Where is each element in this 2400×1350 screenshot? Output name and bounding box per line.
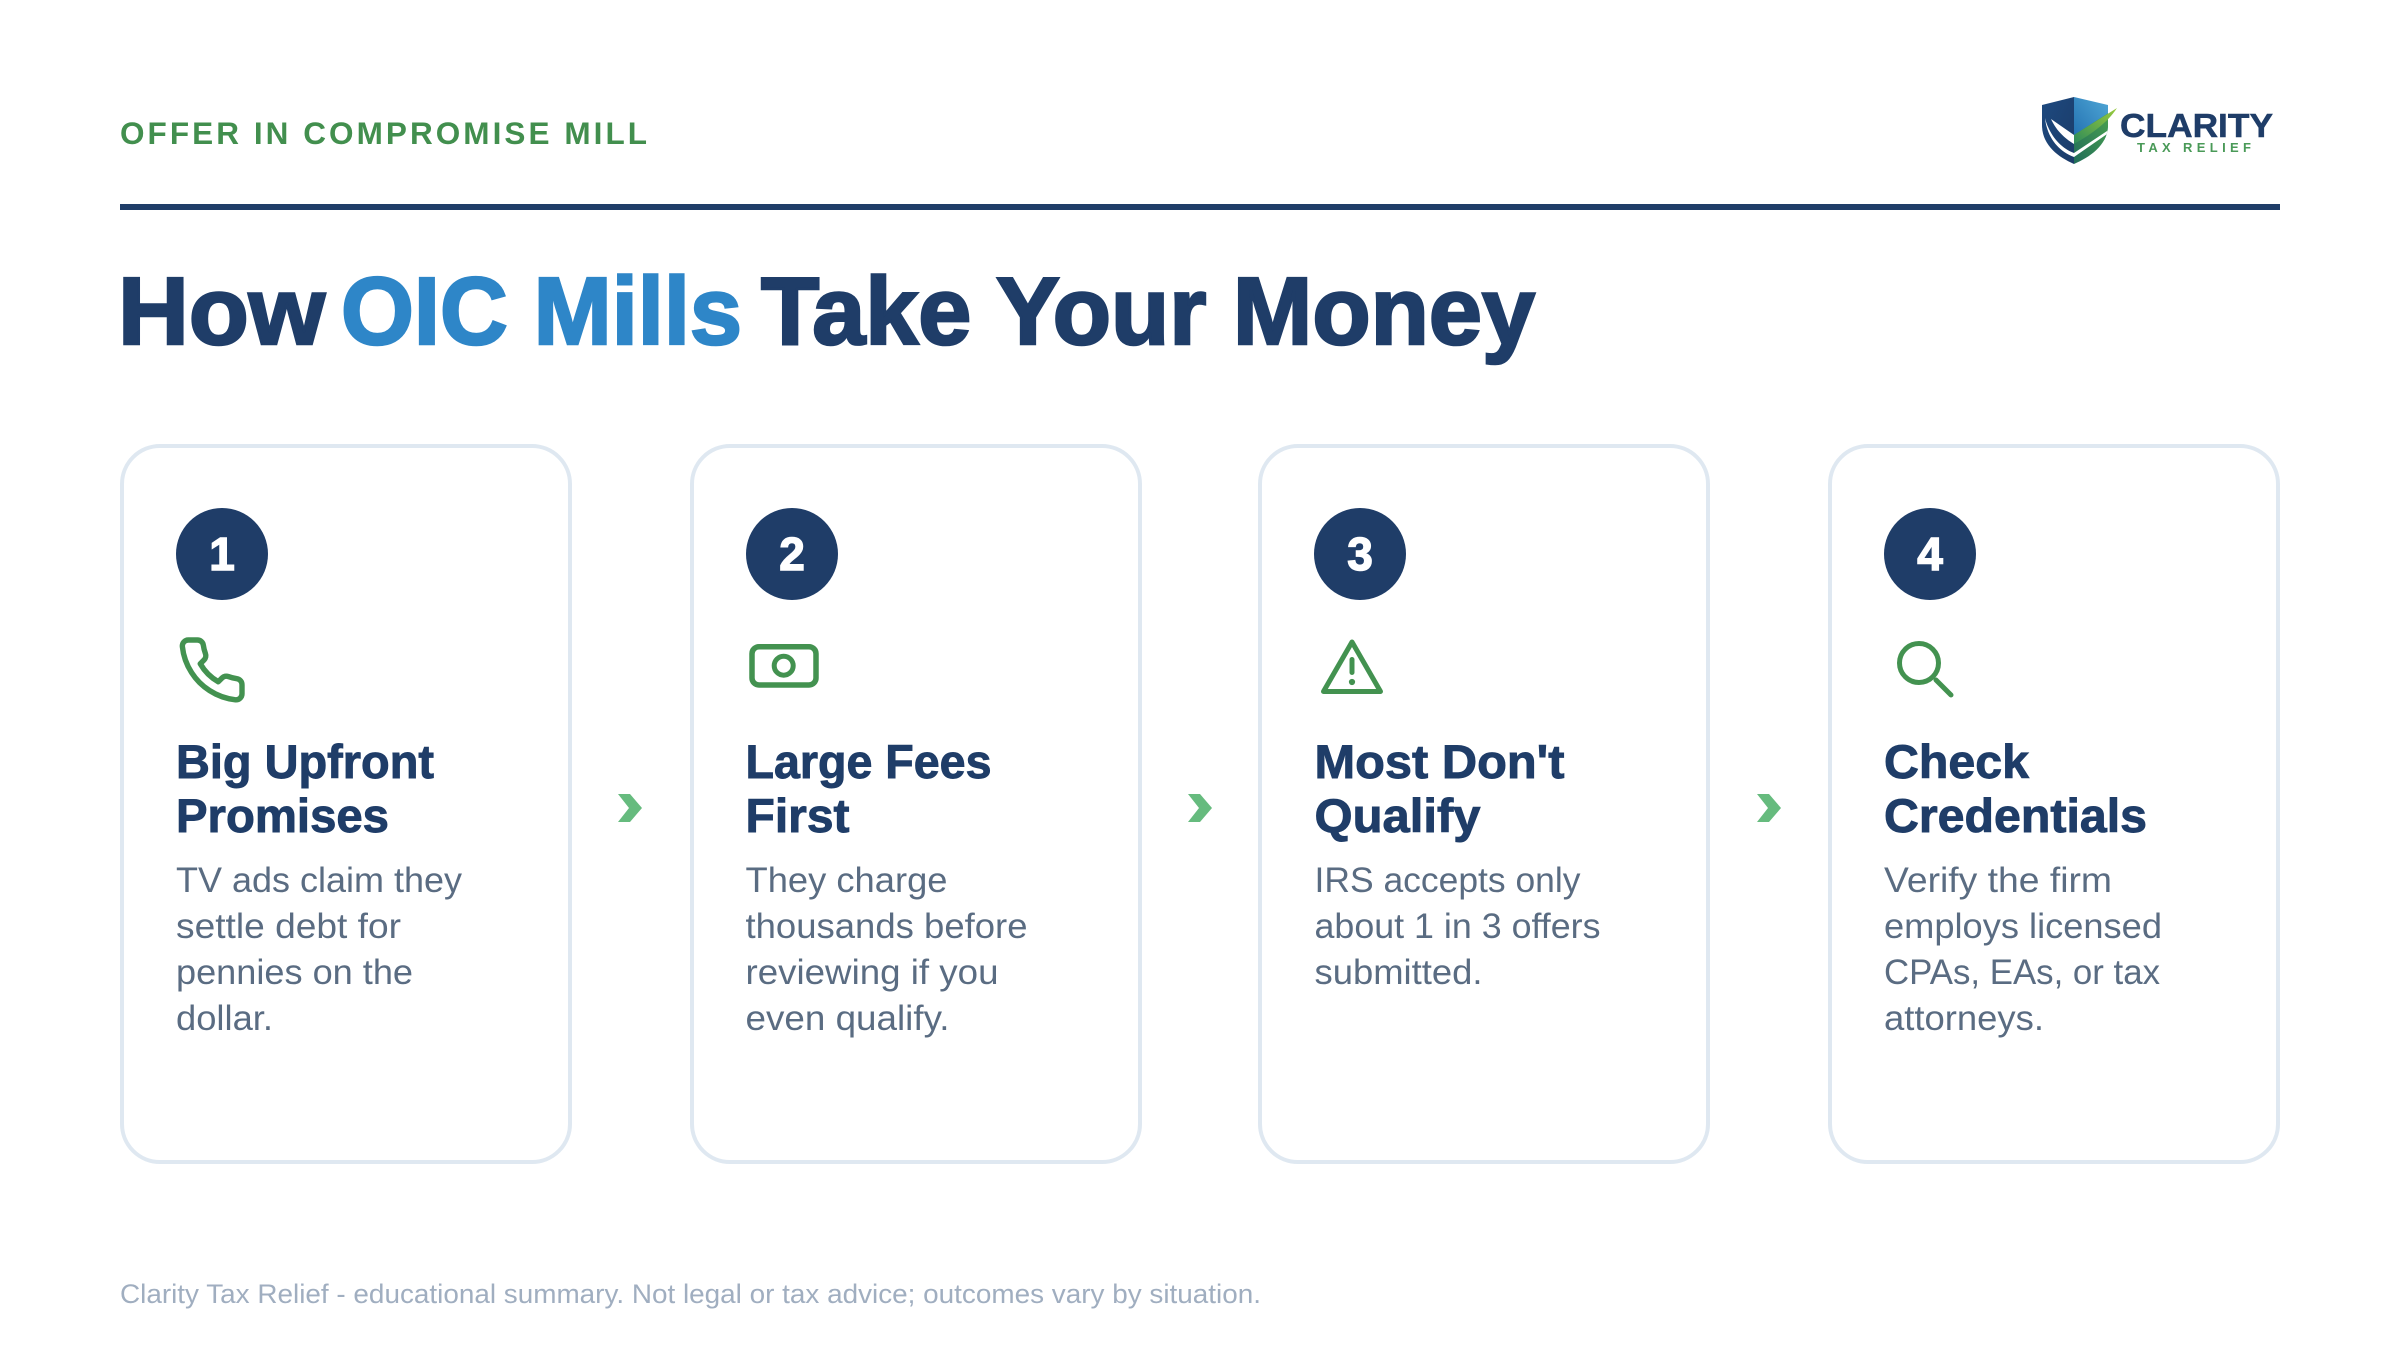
panel: step 4 Check Credentials <box>1830 446 2278 1162</box>
number badge 2 <box>746 508 838 600</box>
logo: Clarity Tax Relief <box>2042 97 2273 164</box>
title: Take Your Money <box>761 258 1535 365</box>
icon: magnifier <box>1900 644 1951 695</box>
icon: phone <box>182 640 242 700</box>
step 3 description: IRS accepts only <box>1314 861 1581 900</box>
number badge 3 <box>1314 508 1406 600</box>
step 2 description <box>746 861 1028 1038</box>
step 1 heading: Promises <box>176 790 389 843</box>
title: OIC Mills <box>341 258 742 365</box>
step 4 heading: Credentials <box>1884 790 2147 843</box>
icon: banknote <box>752 647 816 685</box>
step 4 description: Verify the firm <box>1884 861 2112 900</box>
panel: step 1 Big Upfront Promises <box>122 446 570 1162</box>
step 3 description: about 1 in 3 offers <box>1314 907 1600 946</box>
step 4 heading: Check <box>1884 736 2030 789</box>
number badge 4: 4 <box>1917 528 1943 580</box>
panel: step 2 Large Fees First <box>692 446 1140 1162</box>
step 4 description: attorneys. <box>1884 999 2044 1038</box>
step 2 description: They charge <box>746 861 948 900</box>
step 2 description: thousands before <box>746 907 1028 946</box>
step 1 description: pennies on the <box>176 953 413 992</box>
step 4 description: employs licensed <box>1884 907 2162 946</box>
step 4 heading <box>1884 736 2147 843</box>
step 1 description: dollar. <box>176 999 273 1038</box>
step 4 description <box>1884 861 2162 1038</box>
title <box>118 258 1535 365</box>
header rule <box>120 204 2280 210</box>
step 2 heading <box>746 736 992 843</box>
step 1 description <box>176 861 463 1038</box>
number badge 1 <box>176 508 268 600</box>
step 4 description: CPAs, EAs, or tax <box>1884 953 2160 992</box>
icon: shield with check <box>2042 97 2117 164</box>
step 3 heading: Qualify <box>1314 790 1481 843</box>
arrow 1 to 2 <box>618 794 642 822</box>
step 1 description: settle debt for <box>176 907 401 946</box>
icon: warning triangle <box>1324 642 1380 692</box>
eyebrow heading: OFFER IN COMPROMISE MILL <box>120 115 647 151</box>
step 3 heading: Most Don't <box>1314 736 1565 789</box>
number badge 1: 1 <box>209 528 235 580</box>
step 3 heading <box>1314 736 1565 843</box>
arrow 3 to 4 <box>1757 794 1781 822</box>
arrow 2 to 3 <box>1188 794 1212 822</box>
title: How <box>118 258 325 365</box>
step 2 description: even qualify. <box>746 999 950 1038</box>
panel: step 3 Most Don't Qualify <box>1260 446 1708 1162</box>
step 2 heading: Large Fees <box>746 736 992 789</box>
number badge 2: 2 <box>779 528 805 580</box>
step 3 description <box>1314 861 1600 992</box>
number badge 3: 3 <box>1347 528 1373 580</box>
logo: Clarity Tax Relief: CLARITY <box>2120 107 2273 144</box>
step 3 description: submitted. <box>1314 953 1482 992</box>
logo: Clarity Tax Relief: TAX RELIEF <box>2137 140 2251 155</box>
step 1 heading: Big Upfront <box>176 736 434 789</box>
footer disclaimer: Clarity Tax Relief - educational summary. Not legal or tax advice; outcomes vary by situation. <box>120 1279 1261 1309</box>
step 2 description: reviewing if you <box>746 953 998 992</box>
number badge 4 <box>1884 508 1976 600</box>
step 1 description: TV ads claim they <box>176 861 463 900</box>
step 1 heading <box>176 736 434 843</box>
step 2 heading: First <box>746 790 850 843</box>
